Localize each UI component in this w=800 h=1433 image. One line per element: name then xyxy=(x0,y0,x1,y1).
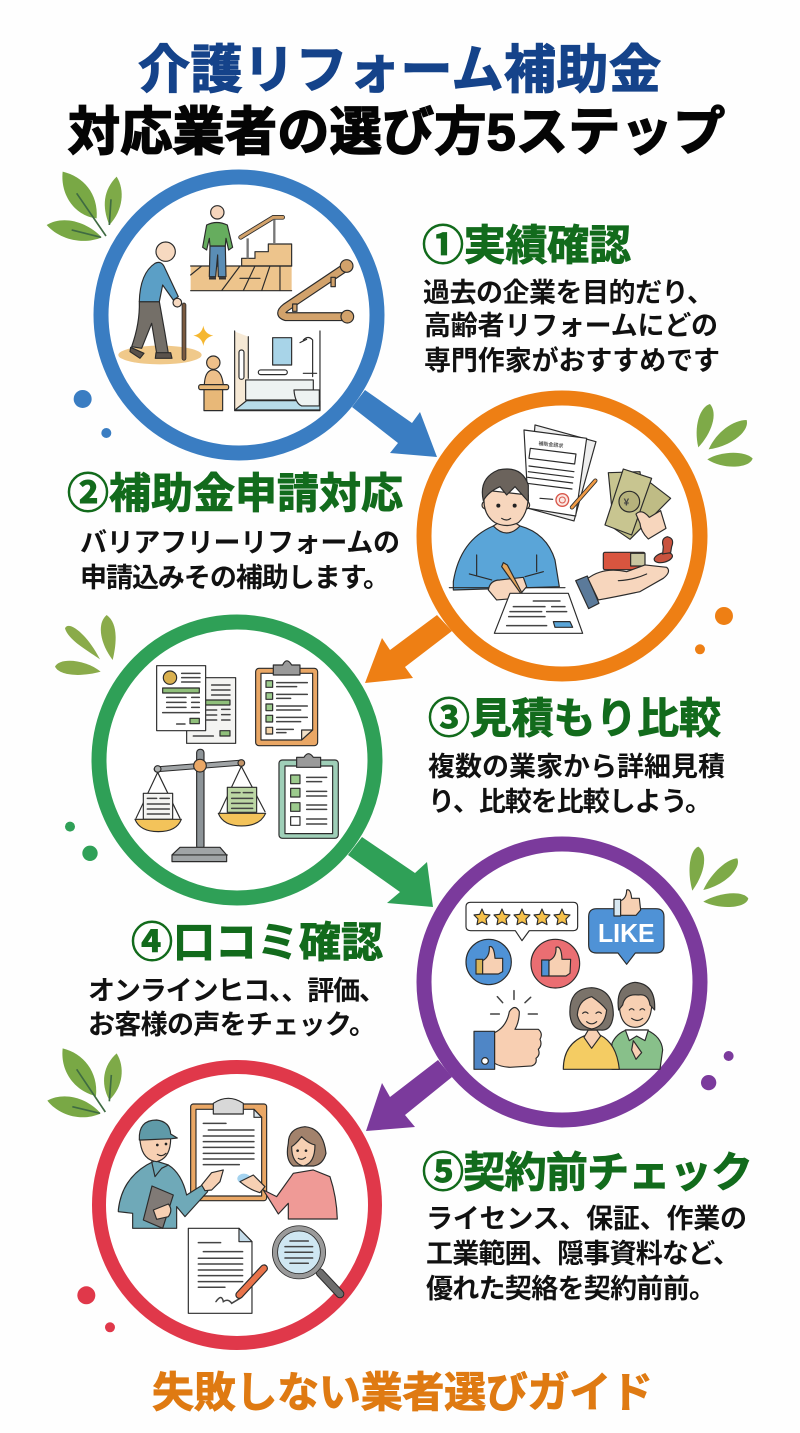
icon: worker xyxy=(118,1120,223,1228)
icon: wall handrail xyxy=(282,260,354,323)
ring: step 3 xyxy=(99,622,375,898)
arrow: step 4 to step 5 xyxy=(366,1060,452,1131)
title: 対応業者の選び方5ステップ xyxy=(68,104,725,162)
illustration: barrier-free home xyxy=(47,172,354,438)
icon: floor and stairs xyxy=(191,217,292,291)
icon: leaves xyxy=(47,1048,122,1117)
icon: application document: 補助金請求 xyxy=(538,440,564,450)
icon: signed document xyxy=(188,1228,264,1313)
panel: step 3 xyxy=(55,615,725,907)
icon: magnifying glass xyxy=(275,1228,340,1294)
arrow: step 3 to step 4 xyxy=(348,837,433,907)
heading: step 3: ③見積もり比較 xyxy=(428,695,721,742)
icon: open hand xyxy=(576,565,669,609)
icon: figure at stand xyxy=(199,356,229,411)
icon: leaves xyxy=(689,847,748,907)
text: step 2 body: バリアフリーリフォームの xyxy=(80,528,400,558)
illustration: contract check xyxy=(47,1048,340,1332)
text: step 5 body xyxy=(426,1204,747,1304)
icon: dots xyxy=(701,1051,734,1090)
icon: standing person xyxy=(203,206,233,278)
text: step 3 body: 複数の業家から詳細見積 xyxy=(428,752,725,782)
text: step 5 body: 優れた契絡を契約前前。 xyxy=(426,1274,716,1304)
illustration: application paperwork xyxy=(449,404,753,654)
text: step 1 body xyxy=(423,278,720,376)
icon: quote documents xyxy=(157,666,236,743)
icon: banknotes: ¥ xyxy=(624,498,630,509)
ring: step 2 xyxy=(424,398,700,674)
icon: orange clipboard xyxy=(256,661,318,746)
icon: red thumb badge xyxy=(531,939,580,988)
icon: leaves xyxy=(47,172,122,241)
icon: big thumbs up xyxy=(474,991,541,1069)
text: step 4 body: お客様の声をチェック。 xyxy=(88,1010,376,1040)
icon: green clipboard xyxy=(279,754,338,838)
text: step 1 body: 専門作家がおすすめです xyxy=(424,345,720,376)
icon: application document xyxy=(524,425,596,521)
panel: step 1 xyxy=(47,172,720,457)
text: step 2 body xyxy=(80,528,400,593)
icon: dots xyxy=(77,1286,115,1332)
text: step 4 body: オンラインヒコ、、評価、 xyxy=(88,976,386,1006)
text: step 1 body: 過去の企業を目的だり、 xyxy=(423,278,714,308)
text: step 2 body: 申請込みその補助します。 xyxy=(80,563,390,593)
icon: dots xyxy=(65,822,98,861)
icon: elderly man with cane xyxy=(118,242,202,364)
icon: star rating bubble xyxy=(466,902,578,941)
heading: step 1: ①実績確認 xyxy=(422,222,631,269)
icon: leaves xyxy=(55,615,116,675)
heading: step 2: ②補助金申請対応 xyxy=(67,470,403,517)
icon: blue thumb badge xyxy=(466,939,511,985)
icon: dots xyxy=(695,607,733,654)
icon: LIKE bubble: LIKE xyxy=(598,918,655,948)
text: step 5 body: 工業範囲、隠事資料など、 xyxy=(426,1239,740,1269)
ring: step 1 xyxy=(101,177,377,453)
icon: LIKE bubble xyxy=(589,890,664,964)
icon: dots xyxy=(74,390,111,438)
title xyxy=(68,42,725,162)
icon: happy couple xyxy=(563,982,663,1069)
icon: form on desk xyxy=(494,593,583,633)
panel: step 4 xyxy=(88,844,748,1131)
panel: step 5 xyxy=(47,1048,753,1343)
ring: step 4 xyxy=(424,844,700,1120)
text: step 3 body: り、比較を比較しよう。 xyxy=(428,787,712,817)
illustration: reviews xyxy=(466,847,748,1090)
heading: step 5: ⑤契約前チェック xyxy=(422,1149,753,1196)
icon: person writing xyxy=(449,469,565,601)
icon: customer woman xyxy=(240,1127,337,1219)
panel: step 2 xyxy=(67,398,753,683)
icon: sparkle xyxy=(193,326,213,346)
illustration: quote comparison xyxy=(55,615,338,862)
text: step 3 body xyxy=(428,752,725,817)
icon: leaves xyxy=(697,404,753,467)
icon: contract clipboard xyxy=(191,1098,267,1201)
heading: step 4: ④口コミ確認 xyxy=(131,919,383,966)
icon: balance scale xyxy=(135,749,266,862)
title: 介護リフォーム補助金 xyxy=(138,42,661,100)
icon: seal stamp and case xyxy=(603,537,673,570)
icon: banknotes xyxy=(605,469,671,539)
icon: accessible bathroom xyxy=(235,331,320,411)
text: step 1 body: 高齢者リフォームにどの xyxy=(424,311,718,341)
text: step 4 body xyxy=(88,976,386,1040)
text: step 5 body: ライセンス、保証、作業の xyxy=(426,1204,747,1234)
footer tagline: 失敗しない業者選びガイド xyxy=(152,1369,653,1416)
arrow: step 2 to step 3 xyxy=(365,615,452,683)
arrow: step 1 to step 2 xyxy=(352,390,437,457)
ring: step 5 xyxy=(99,1067,375,1343)
icon: hand holding banknotes xyxy=(636,511,666,539)
